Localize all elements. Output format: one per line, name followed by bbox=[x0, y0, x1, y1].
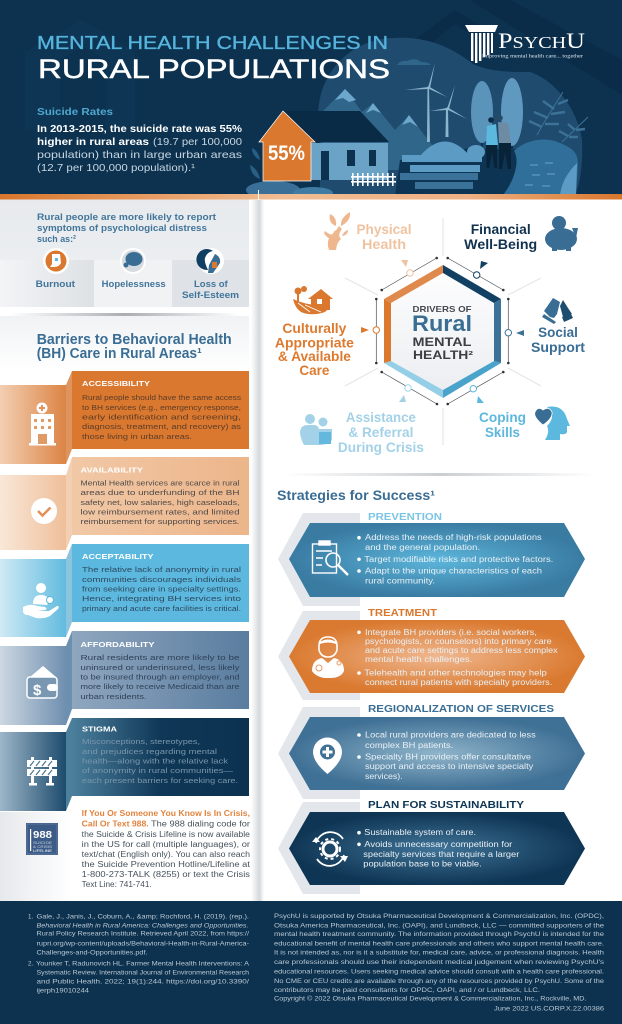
card: affordability: AFFORDABILITY bbox=[80, 640, 154, 649]
disclaimer: No CME or CEU credits are available through any of the resources provided by PsychU. Some of the bbox=[274, 978, 605, 985]
panel: psychological distress bbox=[0, 200, 249, 307]
card: accessibility: diagnosis, treatment, and recovery) as bbox=[82, 422, 241, 431]
driver: culturally appropriate care bbox=[275, 286, 354, 378]
driver: culturally appropriate care: Care bbox=[299, 362, 330, 378]
strategy: regionalization of services: complex BH patients. bbox=[365, 741, 453, 750]
hexagon centre text: HEALTH² bbox=[413, 350, 473, 362]
strategy: treatment: TREATMENT bbox=[368, 607, 438, 619]
driver: coping skills: Coping bbox=[479, 409, 526, 425]
strategy: treatment: psychologists, or counselors) into primary care bbox=[365, 637, 552, 646]
strategy: regionalization of services: Local rural providers are dedicated to less bbox=[365, 730, 536, 740]
card: stigma: and prejudices regarding mental bbox=[82, 747, 217, 756]
references: and Public Health. 2022; 19(1):244. https://doi.org/10.3390/ bbox=[36, 979, 249, 986]
icon: 988 lifeline badge bbox=[26, 823, 58, 855]
driver: culturally appropriate care: Appropriate bbox=[275, 334, 354, 350]
card: acceptability: The relative lack of anonymity in rural bbox=[82, 565, 241, 574]
text block: crisis call to action: the Suicide & Crisis Lifeline is now available bbox=[82, 830, 250, 839]
driver: assistance and referral bbox=[300, 409, 424, 455]
strategy: prevention: Adapt to the unique characteristics of each bbox=[365, 566, 542, 576]
strategy: plan for sustainability: specialty services that require a larger bbox=[363, 850, 520, 859]
driver: culturally appropriate care: & Available bbox=[278, 348, 351, 364]
text block: crisis call to action: 1-800-273-TALK (8255) or text the Crisis bbox=[82, 870, 250, 879]
strategy: prevention: and the general population. bbox=[365, 543, 480, 552]
text block: crisis call to action: If You Or Someone You Know Is In Crisis, bbox=[82, 809, 250, 818]
card: stigma: of anonymity in rural communities— bbox=[82, 766, 234, 775]
disclaimer: mental health treatment community. The information provided through PsychU is intended for the bbox=[274, 931, 605, 938]
references: 2. bbox=[28, 960, 33, 967]
card: stigma: STIGMA bbox=[82, 724, 118, 734]
text block: crisis call to action: in the US for call (multiple languages), or bbox=[82, 840, 250, 849]
driver: social support: Social bbox=[538, 324, 578, 340]
card: affordability: to be insured through an employer, and bbox=[80, 672, 240, 682]
card: accessibility: those living in urban areas. bbox=[82, 432, 192, 441]
card: acceptability bbox=[0, 544, 249, 637]
icon: fern bbox=[529, 92, 588, 142]
icon: doctor bbox=[312, 637, 344, 678]
disclaimer: care professionals should use their independent medical judgement when reviewing PsychU's bbox=[274, 959, 604, 966]
card: stigma: health—along with the relative lack bbox=[82, 756, 228, 766]
logo: PsychU bbox=[465, 25, 585, 63]
text block: crisis call to action: Text Line: 741-741. bbox=[82, 880, 152, 889]
card: availability: reimbursement for supporting services. bbox=[80, 517, 240, 526]
references: Gale, J., Janis, J., Coburn, A., &amp; Rochford, H. (2019). (rep.). bbox=[36, 914, 249, 921]
driver: social support: Support bbox=[531, 339, 585, 355]
text block: suicide rates: higher in rural areas bbox=[37, 137, 149, 148]
icon: wallet bbox=[27, 666, 58, 699]
panel: footer bbox=[0, 901, 622, 1024]
strategy: treatment bbox=[278, 607, 585, 700]
strategy: plan for sustainability: population base to be viable. bbox=[363, 860, 482, 868]
icon: bushes bbox=[246, 148, 333, 199]
text block: suicide rates: In 2013-2015, the suicide rate was 55% bbox=[37, 124, 242, 135]
icon: trees bbox=[471, 78, 523, 155]
orange divider band bbox=[0, 190, 622, 200]
text block: crisis call to action: Call Or Text 988. bbox=[82, 820, 149, 828]
strategy: plan for sustainability bbox=[278, 799, 585, 894]
disclaimer: It is not intended as, nor is it a substitute for, medical care, advice, or professional diagnosis. Health bbox=[274, 949, 605, 956]
title: MENTAL HEALTH CHALLENGES IN bbox=[37, 33, 388, 53]
card: affordability: urban residents. bbox=[80, 692, 146, 701]
icon: wind turbines bbox=[405, 63, 467, 142]
disclaimer bbox=[274, 913, 605, 1012]
disclaimer: Otsuka America Pharmaceutical, Inc. (OAPI), and Lundbeck, LLC — committed supporters of the bbox=[274, 922, 605, 929]
driver: coping skills: Skills bbox=[485, 424, 520, 440]
references: 1. bbox=[28, 914, 33, 921]
driver: coping skills bbox=[479, 406, 570, 440]
references: ijerph19010244 bbox=[36, 988, 90, 995]
heading: barriers bbox=[37, 332, 232, 362]
driver: social support bbox=[531, 298, 585, 355]
card: acceptability: from seeking care in specialty settings. bbox=[82, 584, 241, 594]
intro text: such as:² bbox=[37, 234, 76, 245]
hexagon centre text: Rural bbox=[412, 311, 472, 336]
card: availability: AVAILABILITY bbox=[80, 466, 143, 474]
references: Younker T, Radunovich HL. Farmer Mental Health Interventions: A bbox=[36, 960, 250, 967]
strategy: treatment: mental health challenges. bbox=[365, 655, 472, 664]
icon: location pin with plus bbox=[313, 738, 342, 774]
icon: figure with leaves bbox=[324, 212, 350, 250]
strategy: plan for sustainability: Sustainable system of care. bbox=[364, 828, 476, 837]
disclaimer: June 2022 US.CORP.X.22.00386 bbox=[494, 1005, 605, 1012]
label: loss of self-esteem: Self-Esteem bbox=[182, 290, 239, 301]
text block: crisis call to action: the Suicide Prevention Hotline/Lifeline at bbox=[82, 860, 251, 869]
label: loss of self-esteem: Loss of bbox=[194, 279, 229, 290]
card: affordability bbox=[0, 631, 249, 725]
title: RURAL POPULATIONS bbox=[38, 54, 390, 84]
icon: two people embracing bbox=[300, 414, 332, 445]
card: availability: areas due to underfunding of the BH bbox=[80, 488, 240, 497]
strategy: prevention bbox=[278, 511, 585, 606]
text block: suicide rates: (19.7 per 100,000 bbox=[153, 137, 242, 148]
disclaimer: Copyright © 2022 Otsuka Pharmaceutical Development & Commercialization, Inc., Rockville, MD. bbox=[274, 996, 587, 1003]
logo: PsychU: Improving mental health care... together bbox=[482, 54, 583, 60]
icon: gear with cycle arrows bbox=[312, 832, 348, 866]
heading: strategies for success: Strategies for Success¹ bbox=[277, 488, 436, 503]
label: burnout: Burnout bbox=[36, 279, 76, 290]
driver: physical health: Health bbox=[362, 236, 406, 252]
strategy: prevention: rural community. bbox=[365, 576, 435, 586]
text block: crisis call to action: The 988 dialing code for bbox=[151, 820, 250, 828]
icon: clipboard with magnifier bbox=[312, 541, 348, 575]
icon: piggy bank bbox=[545, 216, 578, 251]
text block: suicide rates: population) than in large urban areas bbox=[37, 150, 242, 161]
heading: barriers: (BH) Care in Rural Areas¹ bbox=[37, 346, 202, 362]
icon: clapping hands bbox=[542, 298, 573, 324]
icon: house with 55%: 55% bbox=[268, 142, 305, 165]
icon: house with 55% bbox=[259, 111, 396, 186]
disclaimer: contributors may be paid consultants for OPDC, OAPI, and / or Lundbeck, LLC. bbox=[274, 987, 540, 994]
strategy: prevention: Address the needs of high-risk populations bbox=[365, 533, 542, 542]
card: acceptability: communities discourages individuals bbox=[82, 575, 241, 584]
driver: physical health: Physical bbox=[356, 221, 412, 237]
references: Behavioral Health in Rural America: Challenges and Opportunities. bbox=[36, 922, 248, 929]
strategy: regionalization of services: Specialty BH providers offer consultative bbox=[365, 752, 532, 762]
strategy: regionalization of services: REGIONALIZATION OF SERVICES bbox=[368, 703, 554, 715]
icon: check bbox=[31, 498, 57, 524]
strategy: plan for sustainability: Avoids unnecessary competition for bbox=[364, 840, 513, 849]
card: acceptability: Hence, integrating BH services into bbox=[82, 594, 241, 603]
card: availability: low reimbursement rates, and limited bbox=[80, 508, 240, 516]
illustration: rural landscape bbox=[246, 38, 588, 199]
strategy: regionalization of services: services). bbox=[365, 772, 403, 781]
card: affordability: Rural residents are more likely to be bbox=[80, 653, 240, 662]
driver: assistance and referral: During Crisis bbox=[338, 439, 424, 455]
card: stigma bbox=[0, 718, 249, 811]
hexagon centre text bbox=[412, 304, 473, 362]
logo: PsychU: PSYCH U bbox=[498, 28, 585, 53]
strategy: prevention: Target modifiable risks and protective factors. bbox=[364, 555, 553, 564]
icon: head with heart bbox=[535, 406, 570, 440]
icon: 988 lifeline badge: LIFELINE bbox=[33, 849, 53, 853]
card: acceptability: primary and acute care facilities is critical. bbox=[82, 604, 241, 613]
hexagon centre text: DRIVERS OF bbox=[412, 304, 472, 314]
strategy: treatment: Telehealth and other technologies may help bbox=[364, 668, 547, 678]
card: accessibility: early identification and screening, bbox=[82, 412, 241, 422]
icon: wallet: $ bbox=[33, 682, 42, 699]
icon: hand with person bbox=[23, 583, 59, 618]
label: hopelessness: Hopelessness bbox=[102, 279, 166, 290]
card: availability: Mental Health services are scarce in rural bbox=[80, 478, 240, 488]
strategy: regionalization of services: support and access to intensive specialty bbox=[365, 762, 533, 771]
text block: crisis call to action: text/chat (English only). You can also reach bbox=[82, 850, 250, 859]
driver: financial well-being: Well-Being bbox=[464, 236, 537, 252]
icon: winding path bbox=[503, 140, 578, 195]
card: affordability: more likely to receive Medicaid than are bbox=[80, 682, 240, 691]
card: stigma: Misconceptions, stereotypes, bbox=[82, 737, 200, 746]
title bbox=[37, 33, 390, 84]
strategy: plan for sustainability: PLAN FOR SUSTAINABILITY bbox=[368, 799, 524, 811]
driver: assistance and referral: Assistance bbox=[346, 409, 416, 425]
icon: farm house bbox=[293, 286, 333, 314]
card: accessibility: to BH services (e.g., emergency response, bbox=[82, 403, 241, 412]
hexagon centre text: MENTAL bbox=[412, 337, 472, 349]
intro text: symptoms of psychological distress bbox=[37, 223, 207, 234]
strategy: prevention: PREVENTION bbox=[368, 511, 442, 523]
driver: culturally appropriate care: Culturally bbox=[282, 320, 347, 336]
icon: 988 lifeline badge: 988 bbox=[33, 830, 52, 841]
icon: two people bbox=[486, 115, 511, 169]
heading: barriers: Barriers to Behavioral Health bbox=[37, 332, 232, 348]
driver: assistance and referral: & Referral bbox=[348, 424, 413, 440]
disclaimer: educational resources. Users seeking medical advice should consult with a health care professional. bbox=[274, 968, 604, 975]
driver: physical health bbox=[324, 212, 412, 252]
garden beds bbox=[400, 142, 485, 189]
card: accessibility: ACCESSIBILITY bbox=[82, 379, 150, 388]
icon: road barrier bbox=[27, 757, 57, 786]
card: accessibility: Rural people should have the same access bbox=[82, 393, 241, 402]
card: affordability: uninsured or underinsured, less likely bbox=[80, 663, 240, 672]
text block: suicide rates: Suicide Rates bbox=[37, 106, 113, 118]
card: stigma: each present barriers for seeking care. bbox=[82, 776, 238, 785]
text block: crisis call to action bbox=[82, 809, 251, 889]
panel: barriers bbox=[0, 316, 251, 901]
icon: 988 lifeline badge: SUICIDE bbox=[33, 841, 53, 845]
references: Systematic Review. International Journal of Environmental Research bbox=[36, 969, 250, 976]
icon: burnout bbox=[43, 248, 69, 274]
icon: loss of self-esteem bbox=[196, 248, 224, 274]
strategy: treatment: and acute care settings to address less complex bbox=[365, 646, 558, 655]
text block: suicide rates bbox=[37, 106, 242, 174]
driver: financial well-being: Financial bbox=[471, 221, 531, 237]
chart: drivers of rural mental health hexagon bbox=[345, 218, 541, 445]
label: loss of self-esteem bbox=[182, 279, 239, 301]
intro text bbox=[37, 212, 217, 245]
strategy: regionalization of services bbox=[278, 703, 585, 799]
card: availability bbox=[0, 457, 249, 550]
references: rupri.org/wp-content/uploads/Behavioral-Health-in-Rural-America- bbox=[36, 940, 249, 947]
card: acceptability: ACCEPTABILITY bbox=[82, 552, 154, 561]
references bbox=[28, 914, 250, 995]
driver: financial well-being bbox=[464, 216, 578, 252]
icon: hospital bbox=[29, 402, 56, 446]
text block: suicide rates: (12.7 per 100,000 population).¹ bbox=[37, 163, 196, 174]
strategy: treatment: Integrate BH providers (i.e. social workers, bbox=[365, 628, 537, 637]
disclaimer: PsychU is supported by Otsuka Pharmaceutical Development & Commercialization, Inc. (OPDC), bbox=[274, 913, 604, 920]
intro text: Rural people are more likely to report bbox=[37, 212, 217, 223]
disclaimer: educational benefit of mental health care professionals and others who support mental health care. bbox=[274, 940, 604, 947]
icon: hopelessness bbox=[120, 248, 146, 274]
panel: header bbox=[0, 0, 622, 199]
card: availability: safety net, low salaries, high caseloads, bbox=[80, 498, 240, 507]
references: Challenges-and-Opportunities.pdf. bbox=[36, 949, 148, 956]
card: accessibility bbox=[0, 371, 249, 464]
references: Rural Policy Research Institute. Retrieved April 2022, from https:// bbox=[36, 931, 249, 938]
icon: 988 lifeline badge: & CRISIS bbox=[33, 845, 53, 849]
strategy: treatment: connect rural patients with specialty providers. bbox=[365, 678, 552, 687]
